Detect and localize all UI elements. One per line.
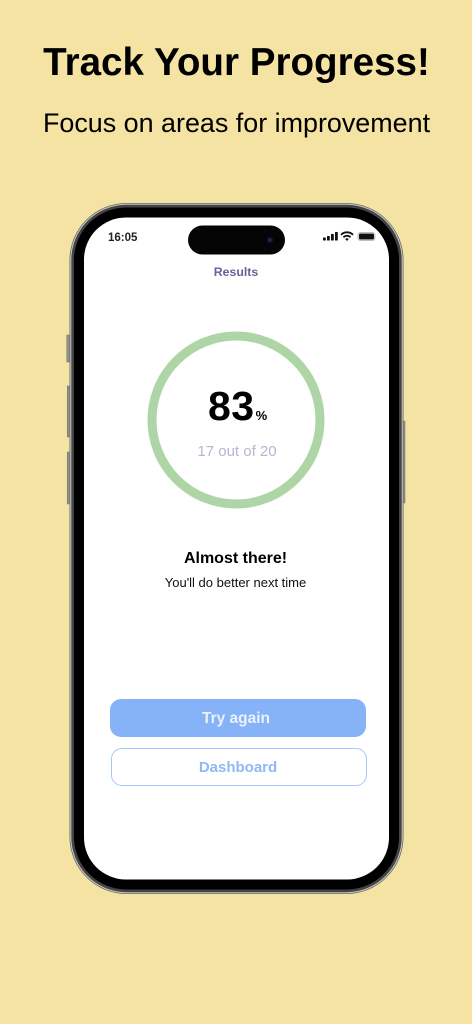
screen heading: Results: Results <box>214 265 258 279</box>
title: Track Your Progress! <box>43 41 430 84</box>
score percentage: 83% <box>208 383 267 429</box>
result message: You'll do better next time <box>165 575 306 590</box>
icon: battery <box>358 232 375 240</box>
status time: 16:05 <box>108 232 137 244</box>
subtitle: Focus on areas for improvement <box>43 108 430 138</box>
score detail: 17 out of 20 <box>197 443 277 460</box>
status bar icons <box>323 232 375 241</box>
result heading: Almost there! <box>184 550 287 567</box>
progress ring <box>152 336 320 504</box>
button: try again <box>110 699 366 737</box>
phone body <box>70 203 404 894</box>
dynamic island <box>188 226 285 254</box>
button: dashboard <box>111 748 367 786</box>
icon: side buttons <box>67 335 405 504</box>
icon: wifi <box>341 232 353 241</box>
button: dashboard: Dashboard <box>199 759 277 776</box>
button: try again: Try again <box>202 710 270 727</box>
icon: signal <box>323 232 338 240</box>
screen <box>84 218 389 880</box>
